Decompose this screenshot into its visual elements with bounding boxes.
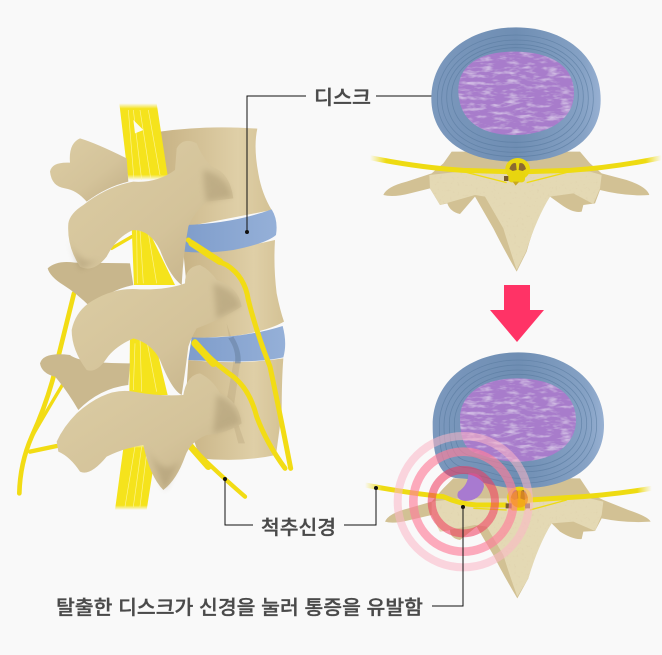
label: spinal nerve: 척추신경: [261, 517, 336, 539]
illustration: side view of lumbar spine: [19, 103, 291, 510]
illustration: healthy disc cross-section: [370, 27, 662, 272]
vertebra silhouette with wings: [383, 152, 649, 272]
bone shading: [68, 170, 240, 490]
spinal cord highlight in rings: [511, 490, 528, 508]
line: disc leader (left): [245, 96, 306, 234]
label: disc: 디스크: [314, 87, 371, 109]
disc nucleus: [460, 378, 576, 462]
line: herniated disc leader: [432, 505, 465, 606]
herniated nucleus: [457, 473, 484, 501]
vertebral bodies: [160, 127, 272, 227]
vertebra silhouette: [385, 478, 651, 598]
vertebra 2 posterior arch: [72, 265, 242, 395]
spinal cord: [506, 487, 532, 511]
illustration: herniated disc cross-section: [365, 352, 652, 598]
line: spinal nerve leader (right): [344, 486, 378, 525]
right nerve roots: [188, 240, 291, 497]
label: herniated disc caption: 탈출한 디스크가 신경을 눌러 통증을 유발함: [56, 597, 423, 619]
vertebra 1 posterior arch: [68, 141, 233, 285]
disc outer annulus: [433, 352, 604, 488]
line: spinal nerve leader (left): [223, 477, 253, 525]
annulus rings: [439, 360, 597, 483]
spinal nerve bundle: [119, 103, 168, 180]
disc outer annulus: [431, 27, 601, 162]
intervertebral discs: [183, 209, 277, 253]
vertebra 3 posterior arch: [57, 373, 242, 490]
spinal nerves: [365, 485, 652, 510]
disc nucleus: [458, 52, 574, 135]
vertebra cut surface: [432, 498, 603, 597]
annulus rings: [437, 35, 593, 157]
left nerve roots: [19, 237, 132, 493]
spinal cord: [504, 158, 530, 186]
transverse processes behind: [50, 138, 128, 202]
spinal nerves: [370, 158, 662, 183]
line: disc leader (right): [376, 94, 446, 98]
arrow: down: [490, 285, 544, 342]
pain rings: [398, 436, 529, 567]
vertebra cut surface: [429, 172, 602, 270]
